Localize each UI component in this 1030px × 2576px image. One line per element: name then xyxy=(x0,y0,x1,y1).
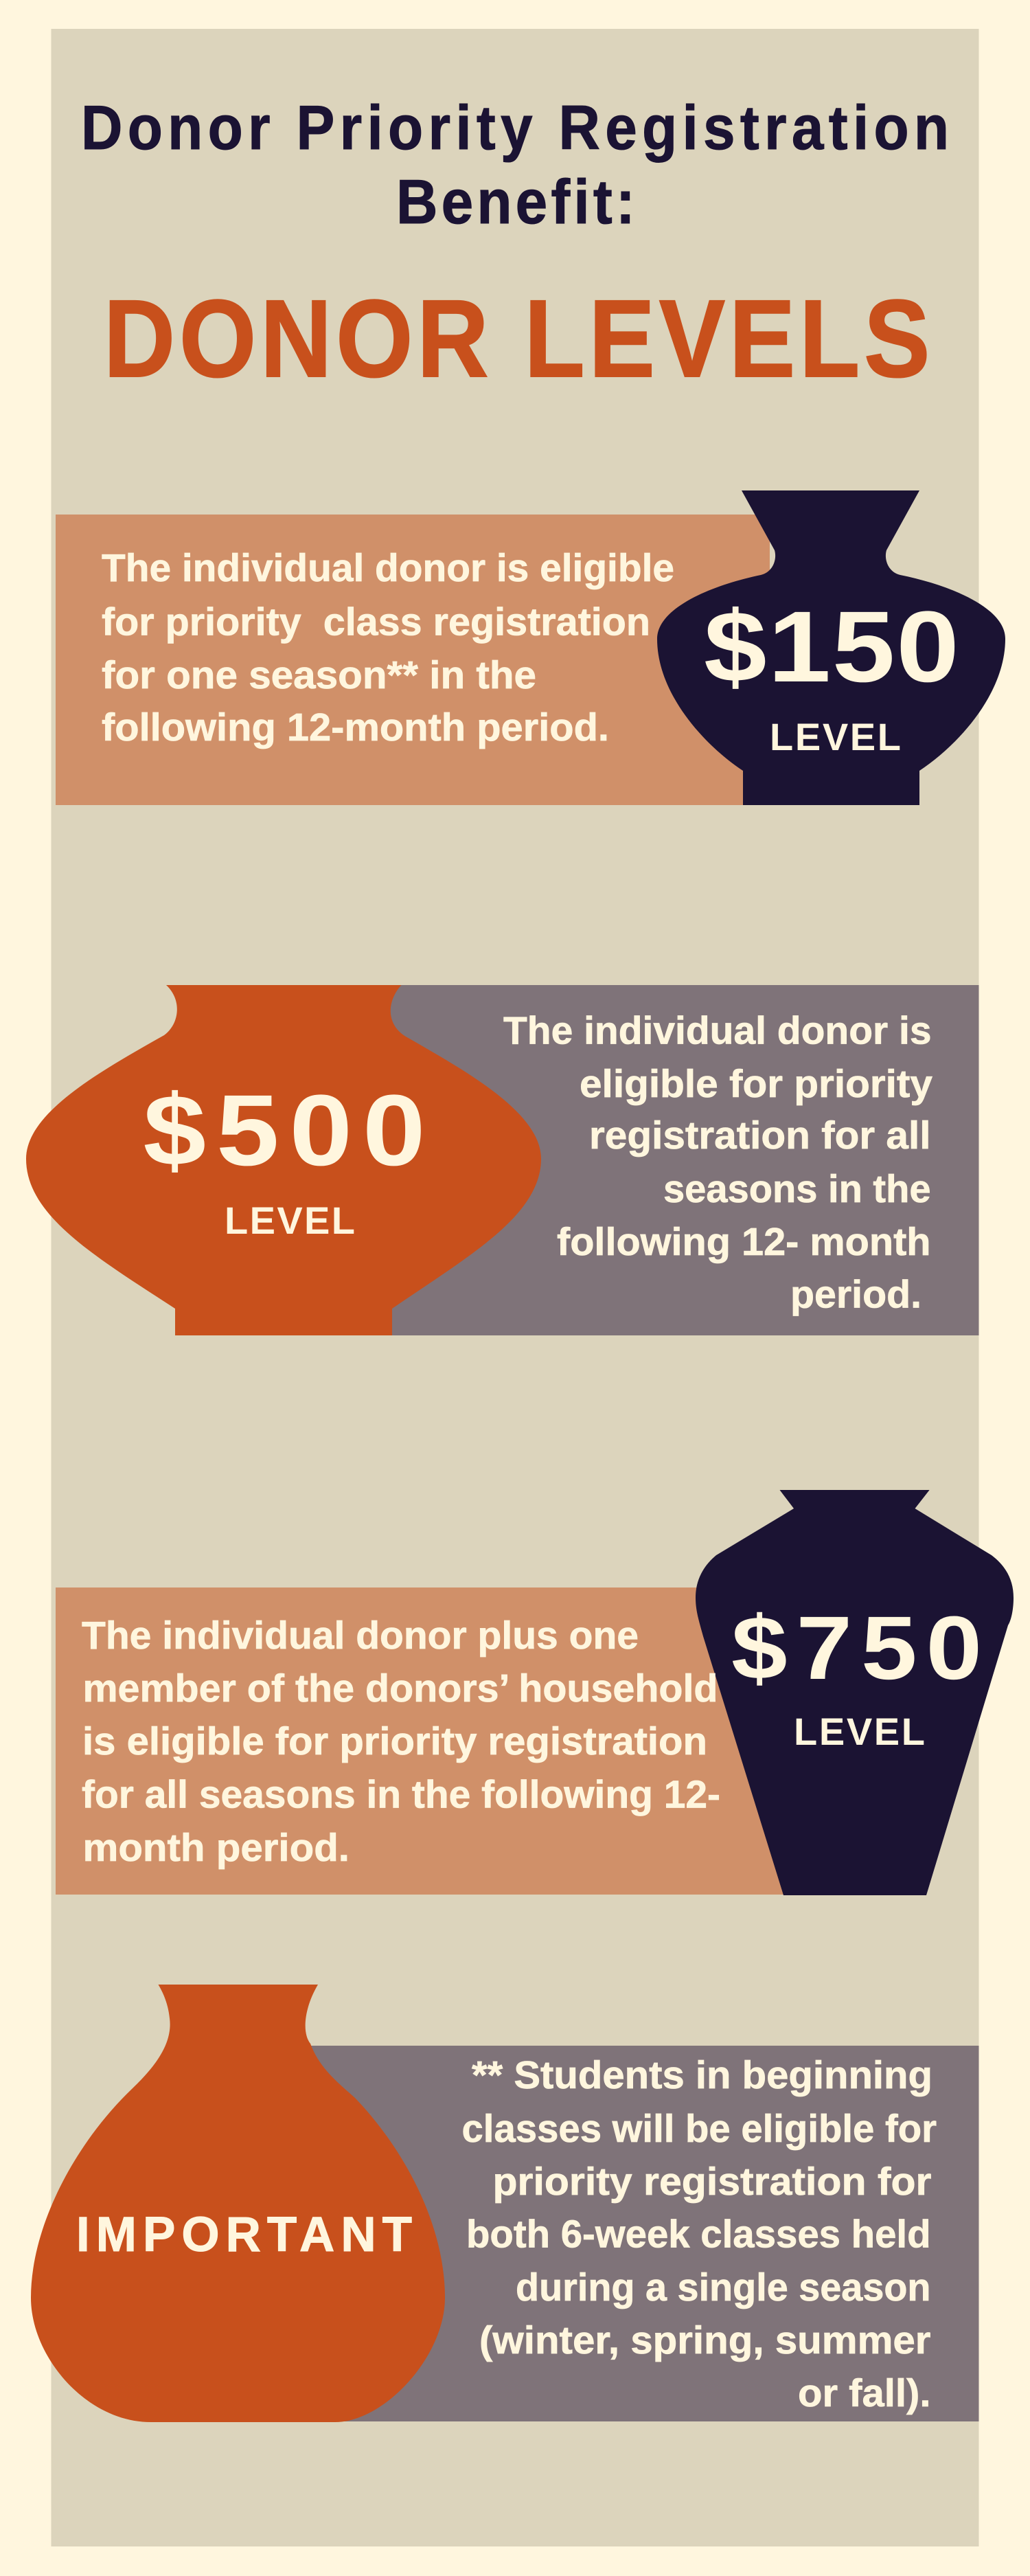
band: $150 description background xyxy=(56,515,770,805)
label: LEVEL: LEVEL xyxy=(770,715,901,758)
title: Donor Priority Registration Benefit: Benefit: xyxy=(396,167,635,237)
text: note: both 6-week classes held xyxy=(466,2212,931,2256)
icon: orange vase xyxy=(26,985,541,1335)
heading: Donor Levels: DONOR LEVELS xyxy=(104,278,930,400)
text: note: or fall). xyxy=(798,2371,931,2415)
panel: $750 level xyxy=(56,1490,1014,1895)
text: note: (winter, spring, summer xyxy=(479,2318,931,2362)
text: note: ** Students in beginning xyxy=(472,2053,932,2097)
text: $750 description xyxy=(82,1614,720,1870)
text: $150 description: for one season** in the xyxy=(102,653,536,697)
text: $750 description: The individual donor plus one xyxy=(82,1614,639,1658)
text: $500 description: following 12- month xyxy=(557,1220,931,1264)
label: $150: $150 xyxy=(704,591,959,703)
text: note: priority registration for xyxy=(493,2160,931,2204)
text: $150 description: following 12-month period. xyxy=(102,705,609,749)
panel: important note xyxy=(31,1985,979,2422)
label: $500: $500 xyxy=(143,1074,426,1187)
label: LEVEL: LEVEL xyxy=(225,1199,355,1242)
text: $500 description: registration for all xyxy=(589,1114,931,1157)
text: $750 description: for all seasons in the following 12- xyxy=(82,1772,720,1816)
text: $750 description: member of the donors’ household xyxy=(82,1667,718,1710)
panel: $500 level xyxy=(26,985,979,1335)
band: $500 description background xyxy=(343,985,979,1335)
text: $150 description xyxy=(102,546,674,749)
title: Donor Priority Registration Benefit xyxy=(81,93,949,237)
label: $750: $750 xyxy=(731,1598,982,1698)
text: $150 description: The individual donor is eligible xyxy=(102,546,674,590)
text: $150 description: for priority class registration xyxy=(102,600,650,644)
text: $750 description: is eligible for priority registration xyxy=(82,1719,707,1763)
text: $500 description: seasons in the xyxy=(663,1167,931,1211)
band: $750 description background xyxy=(56,1588,790,1895)
text: $500 description: eligible for priority xyxy=(580,1062,932,1106)
icon: navy jar xyxy=(696,1490,1014,1895)
text: $500 description: The individual donor is xyxy=(503,1008,931,1052)
text: $750 description: month period. xyxy=(82,1826,350,1870)
panel: $150 level xyxy=(56,490,1005,805)
text: note: classes will be eligible for xyxy=(461,2107,937,2151)
label: IMPORTANT: IMPORTANT xyxy=(76,2208,412,2262)
text: $500 description: period. xyxy=(790,1272,922,1316)
text: $500 description xyxy=(503,1008,932,1316)
band: note background xyxy=(302,2046,979,2421)
label: LEVEL: LEVEL xyxy=(794,1710,925,1753)
title: Donor Priority Registration Benefit: Donor Priority Registration xyxy=(81,93,949,163)
text: note: during a single season xyxy=(516,2266,931,2309)
icon: orange round vase xyxy=(31,1985,445,2422)
text: note xyxy=(461,2053,937,2415)
icon: navy vase xyxy=(657,490,1005,805)
